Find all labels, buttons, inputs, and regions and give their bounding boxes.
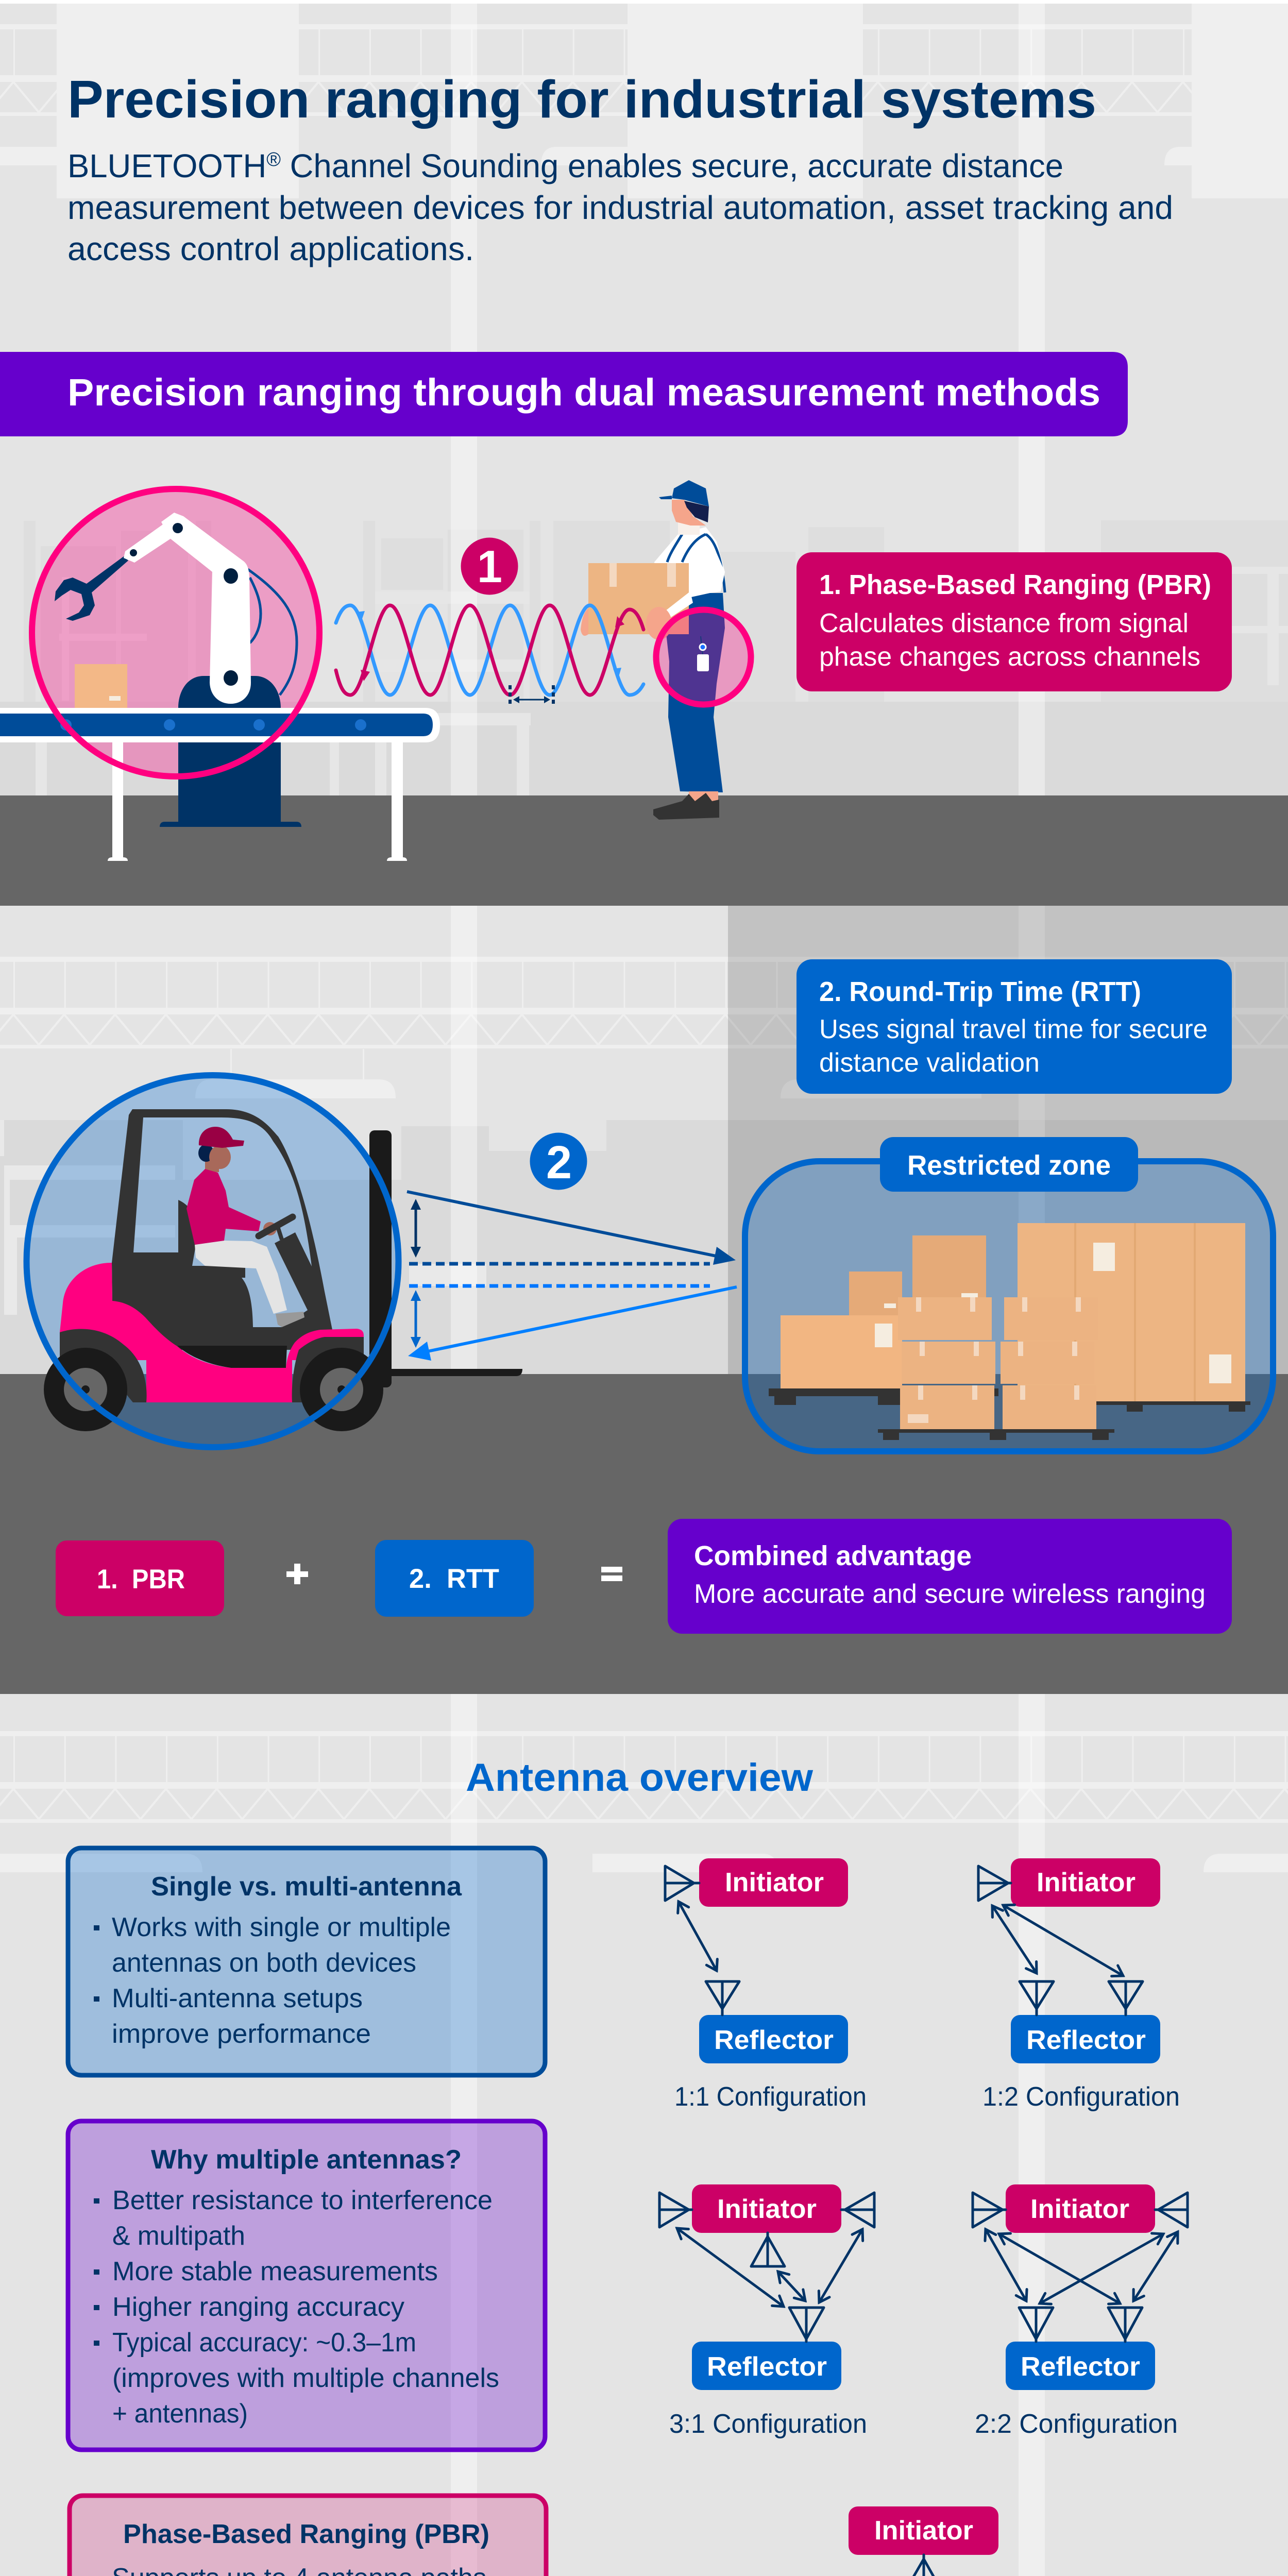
diagram: 1:2 configuration: 1:2 Configuration [982, 2082, 1180, 2112]
diagram: 1:1 configuration: 1:1 Configuration [674, 2082, 867, 2112]
equation: combined advantage [668, 1519, 1232, 1634]
floor pan [177, 1346, 287, 1368]
torso shirt [654, 527, 725, 598]
panel: why multiple antennas: (improves with multiple channels [112, 2363, 499, 2393]
diagram: 3:1 configuration [659, 2184, 874, 2439]
callout: phase-based ranging [796, 552, 1232, 691]
panel: phase-based ranging details [70, 2496, 546, 2576]
panel: why multiple antennas: + antennas) [112, 2399, 248, 2429]
restricted zone with parcels [745, 1137, 1273, 1451]
zone label: Restricted zone [907, 1150, 1111, 1181]
diagram: 2:2 configuration: 2:2 Configuration [975, 2409, 1178, 2439]
panel: single vs multi antenna [68, 1848, 545, 2075]
hair [684, 501, 709, 522]
panel: single vs multi antenna: Single vs. multi-antenna [151, 1872, 462, 1902]
robot highlight circle outline [32, 489, 319, 776]
wheels [44, 1348, 383, 1431]
diagram: 1:1 configuration [665, 1858, 867, 2112]
equation: combined advantage: More accurate and secure wireless ranging [694, 1579, 1206, 1609]
parcel [588, 563, 689, 634]
zone fill [745, 1161, 1273, 1451]
magenta wave [336, 605, 643, 695]
hands [581, 607, 672, 640]
diagram: 3:1 configuration: Initiator [717, 2194, 817, 2224]
orange parcel [75, 664, 127, 708]
panel: single vs multi antenna: Multi-antenna setups [112, 1984, 363, 2013]
callout: round-trip time: 2. Round-Trip Time (RTT) [819, 976, 1141, 1007]
equation: plus sign [286, 1564, 308, 1584]
illustration: worker with parcel [581, 480, 751, 820]
driver [187, 1127, 304, 1327]
section banner [0, 352, 1128, 436]
heading: antenna overview: Antenna overview [466, 1756, 814, 1800]
panel: why multiple antennas: Why multiple antennas? [151, 2145, 462, 2175]
outgoing signal arrow [407, 1192, 736, 1265]
floor section 1 [0, 795, 1288, 906]
equation: equals sign [601, 1567, 622, 1581]
background: antenna and solutions sections [0, 1694, 1288, 2576]
diagram: 3:1 configuration: Reflector [707, 2352, 827, 2382]
robot base [160, 676, 301, 827]
arm segments [124, 513, 251, 704]
pink bodywork [60, 1263, 364, 1402]
panel: why multiple antennas: Higher ranging accuracy [112, 2292, 404, 2322]
intro paragraph [67, 147, 1173, 267]
diagram: 1:1 configuration: Reflector [714, 2025, 834, 2055]
forklift highlight fill [24, 1072, 402, 1450]
parcel tape [908, 1297, 1081, 1423]
conveyor legs [108, 742, 407, 861]
shoes [653, 793, 719, 820]
zone outline [745, 1161, 1273, 1451]
diagram: 1:1 configuration: Initiator [725, 1868, 824, 1897]
callout: round-trip time: Uses signal travel time for secure [819, 1014, 1208, 1044]
callout: round-trip time [796, 959, 1232, 1094]
phase waves between robot and worker [336, 605, 643, 695]
equation: PBR chip [56, 1540, 224, 1616]
gripper [55, 556, 128, 621]
panel: why multiple antennas: More stable measurements [112, 2257, 438, 2286]
rear parcels [849, 1235, 986, 1315]
panel: single vs multi antenna: improve performance [112, 2019, 371, 2049]
equation: combined advantage: Combined advantage [694, 1540, 972, 1571]
title: Precision ranging for industrial systems [67, 70, 1096, 129]
illustration: robot arm on conveyor [0, 486, 440, 861]
diagram: 1:4 configuration: Initiator [874, 2516, 973, 2546]
zone label [880, 1137, 1138, 1192]
front pallet [878, 1429, 1114, 1440]
intro paragraph: access control applications. [67, 230, 474, 267]
panel: single vs multi antenna: Works with single or multiple [112, 1912, 451, 1942]
returning signal arrow [408, 1287, 737, 1361]
blue wave [336, 605, 643, 695]
dashed distance lines [409, 1264, 710, 1286]
wheel arches [60, 1329, 364, 1402]
diagram: 1:4 configuration [816, 2506, 1031, 2576]
callout: phase-based ranging: phase changes across channels [819, 642, 1200, 672]
badge: number 1: 1 [477, 541, 502, 592]
cables [248, 569, 297, 695]
diagram: 3:1 configuration: 3:1 Configuration [669, 2409, 867, 2439]
mast and fork [369, 1130, 522, 1387]
intro paragraph: measurement between devices for industrial automation, asset tracking and [67, 189, 1173, 226]
wave arrowheads [357, 611, 624, 681]
wearable tag [697, 636, 709, 671]
equation: PBR chip: 1. PBR [97, 1564, 185, 1595]
sleeve [665, 546, 725, 618]
panel: why multiple antennas: Better resistance to interference [112, 2185, 493, 2215]
equation: RTT chip: 2. RTT [409, 1564, 499, 1594]
vertical timing arrows [411, 1199, 421, 1348]
panel: phase-based ranging details: Phase-Based Ranging (PBR) [123, 2519, 489, 2549]
left pallet and parcel [769, 1315, 998, 1405]
intro paragraph: BLUETOOTH [67, 147, 268, 184]
badge: number 1 [461, 538, 518, 595]
floor section 2 [0, 1374, 1288, 1694]
panel: why multiple antennas [68, 2121, 545, 2450]
callout: round-trip time: distance validation [819, 1048, 1040, 1078]
ankles [689, 791, 718, 803]
arm joints [130, 523, 238, 686]
neck [678, 520, 700, 535]
background: warehouse section 1 [0, 4, 1288, 803]
diagram: 2:2 configuration: Initiator [1030, 2194, 1129, 2224]
callout: phase-based ranging: Calculates distance from signal [819, 608, 1189, 638]
conveyor belt [0, 708, 440, 742]
diagram: 1:2 configuration [978, 1858, 1180, 2112]
background: warehouse section 2 [0, 906, 1288, 1374]
face [672, 500, 706, 526]
tag highlight circle [656, 610, 751, 705]
illustration: forklift with driver [24, 1072, 522, 1450]
panel: single vs multi antenna: antennas on both devices [112, 1948, 416, 1978]
panel: why multiple antennas: & multipath [112, 2221, 245, 2251]
panel: why multiple antennas: Typical accuracy: ~0.3–1m [112, 2328, 416, 2358]
tall stack [1018, 1223, 1250, 1412]
wavelength marker [510, 685, 553, 704]
top white edge [0, 0, 1288, 4]
diagram: 1:2 configuration: Initiator [1037, 1868, 1136, 1897]
badge: number 2 [530, 1132, 587, 1190]
equation: RTT chip [375, 1540, 534, 1617]
cap [659, 480, 709, 506]
cabin and body [112, 1109, 340, 1350]
diagram: 1:2 configuration: Reflector [1026, 2025, 1146, 2055]
legs and overalls [666, 587, 725, 792]
front stacks [898, 1297, 1098, 1429]
intro paragraph: Channel Sounding enables secure, accurate distance [281, 147, 1063, 184]
callout: phase-based ranging: 1. Phase-Based Ranging (PBR) [819, 569, 1211, 600]
badge: number 2: 2 [546, 1137, 572, 1189]
section banner: Precision ranging through dual measurement methods [67, 371, 1100, 414]
diagram: 2:2 configuration: Reflector [1021, 2352, 1140, 2382]
robot highlight circle fill [29, 486, 323, 779]
diagram: 2:2 configuration [973, 2184, 1188, 2439]
intro paragraph: ® [266, 149, 281, 171]
overall straps [667, 534, 725, 592]
forklift highlight outline [27, 1075, 399, 1447]
